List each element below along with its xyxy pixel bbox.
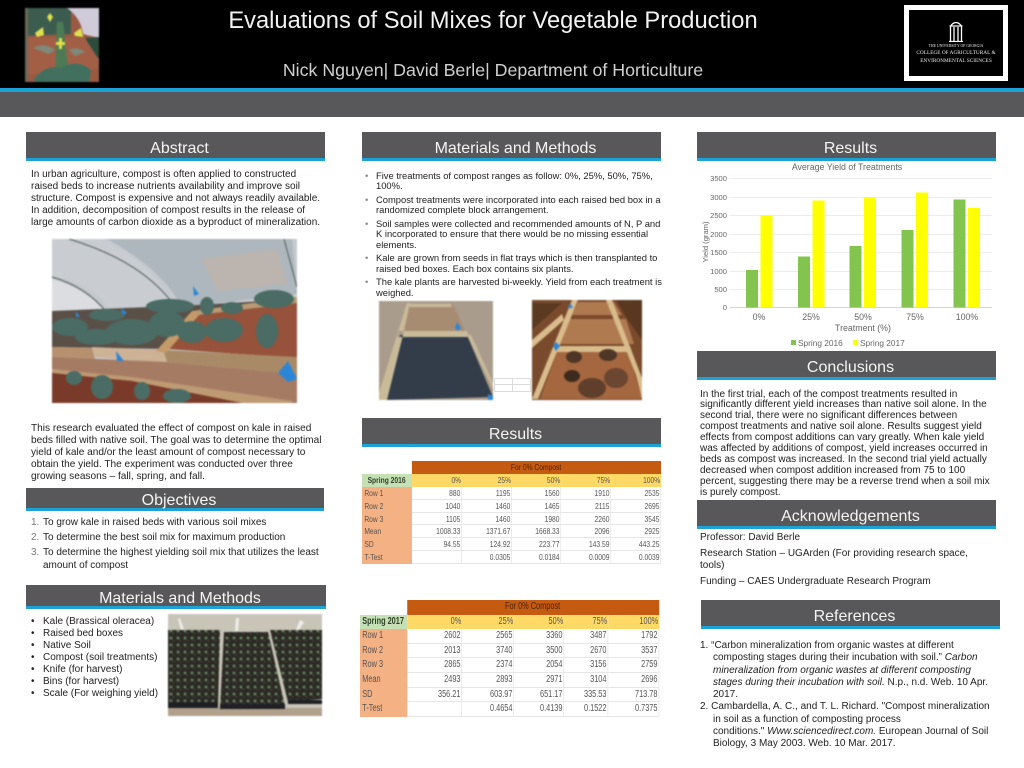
table: spring 2017: Spring 2017 <box>362 616 404 627</box>
references list: stages during their incubation with soil. N.p., n.d. Web. 10 Apr. <box>713 677 988 688</box>
objectives list: To grow kale in raised beds with various soil mixes <box>43 517 266 528</box>
table: spring 2017: 3487 <box>590 630 606 641</box>
references list: 2017. <box>713 689 738 700</box>
table: spring 2016: SD <box>364 539 374 549</box>
table: spring 2016: 2260 <box>595 514 609 524</box>
bar chart: average yield: Spring 2017 <box>860 338 905 348</box>
table: spring 2016: 0.0305 <box>490 552 510 562</box>
materials list: • <box>31 652 35 663</box>
table: spring 2016: Spring 2016 <box>368 475 406 485</box>
materials list: • <box>31 688 35 699</box>
abstract text: structure. Compost is expensive and not always readily available. <box>31 193 320 204</box>
materials list: Raised bed boxes <box>43 628 123 639</box>
table: spring 2016: 100% <box>643 475 660 485</box>
table: spring 2017: 2565 <box>496 630 512 641</box>
table: spring 2016: 143.59 <box>589 539 609 549</box>
bar chart: average yield: 2000 <box>710 230 727 239</box>
table: spring 2017: 2054 <box>546 659 562 670</box>
materials list: Bins (for harvest) <box>43 676 119 687</box>
table: spring 2017: 100% <box>639 616 658 627</box>
table: spring 2017: 2602 <box>444 630 460 641</box>
methods list: • <box>365 194 368 205</box>
methods list: The kale plants are harvested bi-weekly. Yield from each treatment is <box>376 276 662 287</box>
small empty table outline <box>494 378 531 392</box>
objectives list <box>31 517 319 570</box>
bar chart: average yield: 500 <box>714 285 727 294</box>
table: spring 2017: 2865 <box>444 659 460 670</box>
table: spring 2016: 50% <box>547 475 560 485</box>
methods list: Kale are grown from seeds in flat trays which is then transplanted to <box>376 252 657 263</box>
materials list <box>31 616 158 699</box>
heading: objectives <box>26 488 324 511</box>
objectives list: 2. <box>31 532 39 543</box>
table: spring 2017: 2670 <box>590 645 606 656</box>
materials list: Compost (soil treatments) <box>43 652 157 663</box>
research description: obtain the yield. The experiment was conducted over three <box>31 459 293 470</box>
table: spring 2016: 0% <box>451 475 461 485</box>
table: spring 2016: Row 1 <box>364 488 383 498</box>
table: spring 2017: For 0% Compost <box>505 601 560 612</box>
table: spring 2016: 1105 <box>446 514 460 524</box>
materials list: Kale (Brassical oleracea) <box>43 616 154 627</box>
conclusions text: significantly different yield increases than native soil alone. In the <box>700 399 987 410</box>
table: spring 2016: 1980 <box>545 514 560 524</box>
references list: composting stages during their incubation with soil.” Carbon <box>713 652 978 663</box>
materials list: Scale (For weighing yield) <box>43 688 158 699</box>
references list: in soil as a function of composting process <box>713 714 901 724</box>
table: spring 2017: 2696 <box>641 674 657 685</box>
photo: compost bed <box>378 300 494 401</box>
methods list: Compost treatments were incorporated into each raised bed box in a <box>376 194 661 205</box>
table: spring 2017: 25% <box>499 616 513 627</box>
table: spring 2016: 2115 <box>595 501 609 511</box>
table: spring 2017: 3104 <box>590 674 606 685</box>
research description: beds filled with native soil. The goal was to determine the optimal <box>31 435 321 446</box>
table: spring 2017: Row 3 <box>362 659 383 670</box>
table: spring 2016: Row 2 <box>364 501 383 511</box>
table: spring 2017: Mean <box>362 674 381 685</box>
heading: results center <box>362 418 661 447</box>
bar chart: average yield: 25% <box>802 312 820 322</box>
conclusions text: compost treatments and native soil alone. Results suggest yield <box>700 421 982 432</box>
heading: objectives: Objectives <box>142 492 216 509</box>
table: spring 2017: 2493 <box>444 674 460 685</box>
table: spring 2017: 75% <box>593 616 607 627</box>
heading: results right: Results <box>824 140 877 157</box>
objectives list: 1. <box>31 517 39 528</box>
objectives list: To determine the best soil mix for maximum production <box>43 532 285 543</box>
table: spring 2016: Mean <box>364 526 381 536</box>
table: spring 2017: 3360 <box>546 630 562 641</box>
conclusions text: effects from compost additions can vary greatly. When kale yield <box>700 432 984 443</box>
table: spring 2016: 1195 <box>496 488 510 498</box>
table: spring 2017 <box>360 600 660 717</box>
bar chart: average yield: 0 <box>723 303 727 312</box>
acknowledgements text: tools) <box>700 560 724 571</box>
methods list: weighed. <box>376 287 414 298</box>
table: spring 2017: 2893 <box>496 674 512 685</box>
table: spring 2016: Row 3 <box>364 514 383 524</box>
table: spring 2016: 443.25 <box>639 539 659 549</box>
heading: acknowledgements: Acknowledgements <box>781 508 920 525</box>
table: spring 2017: Row 1 <box>362 630 383 641</box>
table: spring 2017: 3500 <box>546 645 562 656</box>
table: spring 2017: 3740 <box>496 645 512 656</box>
conclusions text: beds as compost was increased. In the second trial yield actually <box>700 454 987 465</box>
table: spring 2016: 1460 <box>495 514 510 524</box>
table: spring 2017: 0% <box>451 616 461 627</box>
table: spring 2017: 1792 <box>641 630 657 641</box>
heading: materials and methods center: Materials and Methods <box>435 140 596 157</box>
bar chart: average yield: 3000 <box>710 193 727 202</box>
grey banner <box>0 92 1024 117</box>
table: spring 2016: 25% <box>498 475 511 485</box>
table: spring 2016: 1460 <box>495 501 510 511</box>
methods list: Five treatments of compost ranges as follow: 0%, 25%, 50%, 75%, <box>376 170 653 181</box>
logo text <box>916 44 996 64</box>
table: spring 2017: 3537 <box>641 645 657 656</box>
materials list: • <box>31 640 35 651</box>
objectives list: 3. <box>31 547 39 558</box>
table: spring 2016: 1040 <box>445 501 460 511</box>
table: spring 2017: 50% <box>549 616 563 627</box>
table: spring 2016: 94.55 <box>444 539 460 549</box>
heading: results right <box>697 132 996 161</box>
table: spring 2017: 3156 <box>590 659 606 670</box>
chart title: Average Yield of Treatments <box>792 162 903 172</box>
table: spring 2016: 223.77 <box>539 539 560 549</box>
table: spring 2016: 2535 <box>645 488 659 498</box>
table: spring 2016: 1560 <box>545 488 560 498</box>
table: spring 2016 <box>362 461 661 564</box>
research description: growing seasons – fall, spring, and fall. <box>31 471 205 482</box>
heading: references <box>701 600 1000 629</box>
table: spring 2016: 0.0039 <box>639 552 659 562</box>
abstract text: large amounts of carbon dioxide as a byproduct of mineralization. <box>31 217 320 228</box>
conclusions text: In the first trial, each of the compost treatments resulted in <box>700 388 957 400</box>
conclusions text: percent, suggesting there may be a reverse trend when a soil mix <box>700 476 990 487</box>
table: spring 2017: Row 2 <box>362 645 383 656</box>
icon: kale plant photo <box>24 7 100 83</box>
bar chart: average yield: 100% <box>956 312 978 322</box>
abstract text <box>31 169 320 228</box>
bar chart: average yield: 75% <box>906 312 924 322</box>
references list: 2. Cambardella, A. C., and T. L. Richard. "Compost mineralization <box>700 701 990 712</box>
research description: This research evaluated the effect of compost on kale in raised <box>31 423 311 434</box>
table: spring 2016: 0.0184 <box>539 552 560 562</box>
table: spring 2017: 356.21 <box>438 689 460 700</box>
heading: abstract <box>26 132 325 161</box>
heading: abstract: Abstract <box>150 140 209 157</box>
conclusions text: decreased when compost addition increased from 75 to 100 <box>700 465 965 476</box>
bar chart: average yield: 50% <box>854 312 872 322</box>
methods list: • <box>365 252 368 263</box>
acknowledgements text: Research Station – UGArden (For providing research space, <box>700 548 968 559</box>
table: spring 2016: 1465 <box>545 501 560 511</box>
materials list: Native Soil <box>43 640 91 651</box>
table: spring 2016: For 0% Compost <box>511 462 561 472</box>
methods list: • <box>365 170 368 181</box>
table: spring 2016: 1668.33 <box>535 526 560 536</box>
methods list: • <box>365 276 368 287</box>
objectives list: amount of compost <box>43 560 128 570</box>
conclusions text <box>700 388 990 498</box>
table: spring 2017: 603.97 <box>490 689 512 700</box>
methods list: randomized complete block arrangement. <box>376 204 548 215</box>
bar chart: average yield: Spring 2016 <box>798 338 843 348</box>
abstract text: In addition, decomposition of compost results in the release of <box>31 205 305 216</box>
references list: conditions." Www.sciencedirect.com. European Journal of Soil <box>713 726 988 737</box>
table: spring 2017: 2013 <box>444 645 460 656</box>
references list <box>700 640 990 749</box>
table: spring 2017: 0.4139 <box>540 703 562 714</box>
acknowledgements text <box>700 532 968 587</box>
table: spring 2017: T-Test <box>362 703 382 714</box>
table: spring 2016: 124.92 <box>490 539 510 549</box>
research description <box>31 423 321 482</box>
conclusions text: second trial, there were no significant differences between <box>700 410 957 421</box>
methods list: Soil samples were collected and recommended amounts of N, P and <box>376 218 660 229</box>
logo <box>904 5 1008 81</box>
bar chart: average yield: 1000 <box>710 267 727 276</box>
header accent line <box>0 88 1024 92</box>
table: spring 2016: 1008.33 <box>436 526 460 536</box>
table: spring 2016: 880 <box>449 488 460 498</box>
acknowledgements text: Professor: David Berle <box>700 532 800 543</box>
photo: seedling trays <box>167 613 323 717</box>
acknowledgements text: Funding – CAES Undergraduate Research Program <box>700 576 931 587</box>
heading: results center: Results <box>489 426 542 443</box>
abstract text: raised beds to increase nutrients availability and improve soil <box>31 181 300 192</box>
methods list: raised bed boxes. Each box contains six plants. <box>376 263 574 274</box>
bar chart: average yield: Yield (gram) <box>701 221 710 263</box>
abstract text: In urban agriculture, compost is often applied to constructed <box>31 169 296 180</box>
heading: conclusions: Conclusions <box>807 359 894 376</box>
table: spring 2017: SD <box>362 689 372 700</box>
bar chart: average yield: Treatment (%) <box>835 323 891 333</box>
table: spring 2017: 2759 <box>641 659 657 670</box>
heading: acknowledgements <box>697 500 996 529</box>
table: spring 2017: 2374 <box>496 659 512 670</box>
table: spring 2016: 1371.67 <box>486 526 510 536</box>
methods list: elements. <box>376 239 417 250</box>
materials list: • <box>31 676 35 687</box>
table: spring 2016: 0.0009 <box>589 552 609 562</box>
authors: Nick Nguyen| David Berle| Department of Horticulture <box>283 60 703 80</box>
table: spring 2016: 1910 <box>595 488 609 498</box>
bar chart: average yield: 1500 <box>710 248 727 257</box>
table: spring 2016: 2925 <box>645 526 659 536</box>
materials list: • <box>31 664 35 675</box>
table: spring 2016: 75% <box>597 475 610 485</box>
methods list: 100%. <box>376 180 403 191</box>
table: spring 2017: 2971 <box>546 674 562 685</box>
methods list <box>365 170 662 298</box>
conclusions text: was affected by additions of compost, yield increases occurred in <box>700 443 988 454</box>
materials list: Knife (for harvest) <box>43 664 122 675</box>
heading: conclusions <box>697 351 996 380</box>
references list: 1. “Carbon mineralization from organic wastes at different <box>700 640 954 651</box>
table: spring 2017: 651.17 <box>540 689 562 700</box>
logo text: COLLEGE OF AGRICULTURAL & <box>916 50 996 56</box>
logo text: ENVIRONMENTAL SCIENCES <box>920 58 992 64</box>
header band <box>0 0 1024 92</box>
bar chart: average yield: 0% <box>753 312 766 322</box>
methods list: • <box>365 218 368 229</box>
table: spring 2016: 3545 <box>645 514 659 524</box>
icon: arch <box>949 22 963 42</box>
objectives list: To determine the highest yielding soil mix that utilizes the least <box>43 547 319 558</box>
methods list: K incorporated to ensure that there would be no missing essential <box>376 228 648 239</box>
heading: materials and methods left: Materials and Methods <box>99 590 261 607</box>
table: spring 2017: 335.53 <box>584 689 606 700</box>
table: spring 2016: 2695 <box>645 501 659 511</box>
title: Evaluations of Soil Mixes for Vegetable Production <box>228 8 758 34</box>
heading: references: References <box>814 608 895 625</box>
photo: raised beds in hoop house <box>51 238 298 404</box>
bar chart: average yield <box>701 162 992 348</box>
table: spring 2017: 0.7375 <box>635 703 657 714</box>
logo text: THE UNIVERSITY OF GEORGIA <box>929 44 983 48</box>
heading: materials and methods left <box>26 585 326 609</box>
table: spring 2017: 713.78 <box>635 689 657 700</box>
photo: soil bed with planting holes <box>531 299 643 401</box>
bar chart: average yield: 2500 <box>710 211 727 220</box>
research description: yield of kale and/or the least amount of compost necessary to <box>31 447 305 458</box>
table: spring 2016: T-Test <box>364 552 383 562</box>
conclusions text: is purely compost. <box>700 487 781 498</box>
heading: materials and methods center <box>362 132 661 161</box>
materials list: • <box>31 628 35 639</box>
materials list: • <box>31 616 35 627</box>
bar chart: average yield: 3500 <box>710 174 727 183</box>
references list: mineralization from organic wastes at different composting <box>713 664 971 676</box>
table: spring 2017: 0.4654 <box>490 703 512 714</box>
table: spring 2016: 2096 <box>595 526 609 536</box>
references list: Biology, 3 May 2003. Web. 10 Mar. 2017. <box>713 738 896 749</box>
table: spring 2017: 0.1522 <box>584 703 606 714</box>
